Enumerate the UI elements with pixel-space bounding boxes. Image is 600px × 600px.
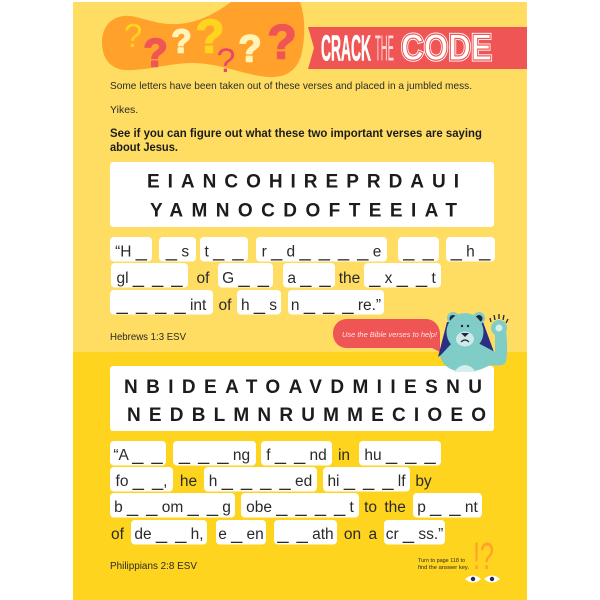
puzzle verse 2: Philippians 2:8: fo _ _, <box>116 469 167 491</box>
speech bubble: Use the Bible verses to help! <box>342 330 438 339</box>
title banner: Crack the Code: CODE <box>401 27 492 68</box>
puzzle verse 1: Hebrews 1:3: _ x _ _ t <box>368 266 436 288</box>
puzzle verse 2: Philippians 2:8: “A _ _ <box>113 443 164 465</box>
puzzle verse 2: Philippians 2:8: b _ _ om _ _ g <box>114 495 231 517</box>
intro text: about Jesus. <box>110 142 178 154</box>
jumbled letters panel 2: NEDBLMNRUMMECIOEO <box>127 405 486 426</box>
puzzle verse 2: Philippians 2:8: _ _ ath <box>276 522 334 544</box>
intro text <box>110 80 482 154</box>
jumbled letters panel 1: YAMNOCDOFTEEIAT <box>150 200 457 222</box>
icon: peeking eyes <box>465 576 500 582</box>
puzzle verse 2: Philippians 2:8: e _ en <box>218 522 264 544</box>
puzzle verse 2: Philippians 2:8: obe _ _ _ _ t <box>246 495 355 517</box>
jumbled letters panel 1: EIANCOHIREPRDAUI <box>147 172 459 192</box>
puzzle verse 1: Hebrews 1:3: “H _ <box>115 240 148 262</box>
puzzle verse 1: Hebrews 1:3: t _ _ <box>204 240 244 262</box>
title banner: Crack the Code: CODE <box>401 27 492 68</box>
puzzle verse 1: Hebrews 1:3: of <box>219 297 232 314</box>
puzzle verse 1: Hebrews 1:3: G _ _ <box>222 266 270 288</box>
reference: Philippians 2:8 ESV: Philippians 2:8 ESV <box>110 560 197 572</box>
title banner: Crack the Code: THE <box>375 28 394 68</box>
intro text: Some letters have been taken out of these verses and placed in a jumbled mess. <box>110 80 472 92</box>
header question mark blob: ? <box>196 10 224 62</box>
intro text: Yikes. <box>110 104 138 116</box>
puzzle verse 2: Philippians 2:8: _ _ _ ng <box>178 443 250 465</box>
puzzle verse 2: Philippians 2:8: hi _ _ _ lf <box>327 469 406 491</box>
puzzle verse 2: Philippians 2:8: f _ _ nd <box>266 443 327 465</box>
title banner: Crack the Code <box>308 27 527 69</box>
header question mark blob <box>102 2 304 80</box>
puzzle verse 2: Philippians 2:8 <box>110 441 482 544</box>
jumbled letters panel 2: NBIDEATOAVDMIIESNU <box>124 377 482 398</box>
puzzle verse 1: Hebrews 1:3: the <box>339 270 360 287</box>
puzzle verse 2: Philippians 2:8: to the <box>364 499 406 516</box>
puzzle verse 2: Philippians 2:8: hu _ _ _ <box>364 443 436 465</box>
icon: bear mascot <box>438 312 508 372</box>
puzzle verse 1: Hebrews 1:3: _ h _ <box>450 240 491 262</box>
title banner: Crack the Code: CRACK <box>321 28 371 68</box>
puzzle verse 1: Hebrews 1:3: h _ s <box>241 293 277 315</box>
page background: lower section <box>73 352 527 600</box>
page background: upper section <box>73 2 527 352</box>
jumbled letters panel 2 <box>110 366 494 431</box>
header question mark blob: ? <box>238 28 262 70</box>
puzzle verse 2: Philippians 2:8: on a <box>344 526 377 543</box>
puzzle verse 2: Philippians 2:8: in <box>338 447 350 464</box>
jumbled letters panel 1 <box>110 162 494 227</box>
header question mark blob: ? <box>124 17 142 54</box>
puzzle verse 1: Hebrews 1:3: _ s <box>165 240 189 262</box>
puzzle verse 2: Philippians 2:8: he <box>180 473 197 490</box>
puzzle verse 2: Philippians 2:8: h _ _ _ _ ed <box>209 469 312 491</box>
puzzle verse 1: Hebrews 1:3: n _ _ _ re.” <box>291 293 381 315</box>
puzzle verse 2: Philippians 2:8: de _ _ h, <box>134 522 204 544</box>
puzzle verse 2: Philippians 2:8: of <box>111 526 125 543</box>
puzzle verse 1: Hebrews 1:3: gl _ _ _ <box>116 266 183 288</box>
icon: exclamation and question marks: !? <box>473 536 494 578</box>
puzzle verse 2: Philippians 2:8: by <box>415 473 432 490</box>
puzzle verse 1: Hebrews 1:3 <box>110 237 495 315</box>
puzzle verse 1: Hebrews 1:3: a _ _ <box>287 266 332 288</box>
header question mark blob: ? <box>171 22 192 60</box>
intro text: See if you can figure out what these two important verses are saying <box>110 128 482 140</box>
header question mark blob: ? <box>143 32 168 76</box>
reference: Hebrews 1:3 ESV: Hebrews 1:3 ESV <box>110 331 186 343</box>
puzzle verse 1: Hebrews 1:3: _ _ _ _ int <box>116 293 207 315</box>
puzzle verse 1: Hebrews 1:3: of <box>197 270 210 287</box>
header question mark blob: ? <box>267 16 297 70</box>
speech bubble <box>333 319 440 352</box>
puzzle verse 1: Hebrews 1:3: _ _ <box>402 240 435 262</box>
puzzle verse 1: Hebrews 1:3: r _ d _ _ _ _ e <box>262 240 381 262</box>
answer key note: Turn to page 118 to <box>418 558 465 564</box>
answer key note: find the answer key. <box>418 565 469 571</box>
answer key note <box>418 558 469 571</box>
puzzle verse 2: Philippians 2:8: p _ _ nt <box>417 495 478 517</box>
header question mark blob: ? <box>217 42 235 80</box>
puzzle verse 2: Philippians 2:8: cr _ ss.” <box>386 522 443 544</box>
